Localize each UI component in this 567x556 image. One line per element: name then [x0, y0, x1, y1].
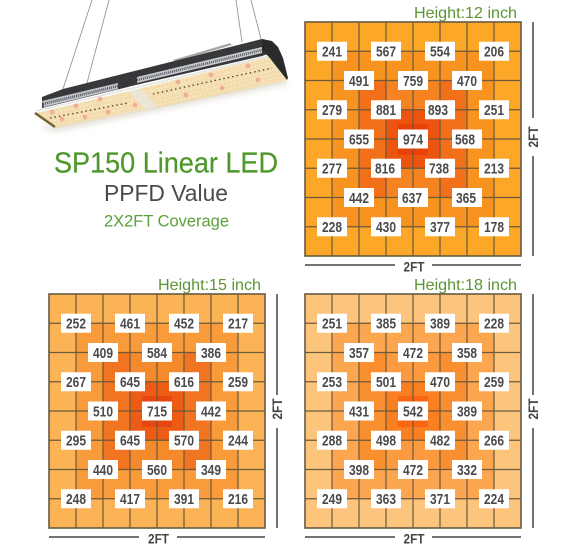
PPFD values: 358 — [457, 345, 477, 362]
PPFD values: 389 — [457, 403, 477, 420]
PPFD values: 655 — [349, 131, 369, 148]
PPFD values: 259 — [484, 374, 504, 391]
PPFD values: 442 — [349, 190, 369, 207]
PPFD values: 554 — [430, 44, 451, 60]
PPFD values: 295 — [66, 432, 86, 450]
panel: height 12 inch — [305, 5, 541, 274]
PPFD values: 365 — [456, 190, 476, 207]
PPFD values: 881 — [376, 102, 396, 119]
PPFD values: 472 — [403, 462, 423, 479]
PPFD values: 491 — [349, 73, 369, 90]
PPFD values: 259 — [228, 374, 248, 391]
PPFD values: 645 — [120, 432, 140, 450]
PPFD values: 389 — [430, 316, 450, 332]
PPFD values: 482 — [430, 432, 450, 450]
PPFD values: 645 — [120, 374, 140, 391]
icon: left heat fins — [42, 83, 118, 107]
heading: Height:12 inch — [414, 5, 517, 22]
PPFD values: 252 — [66, 316, 86, 332]
panel: height 15 inch — [49, 277, 285, 546]
PPFD values: 228 — [322, 219, 342, 236]
height dimension: 2FT — [525, 126, 541, 148]
PPFD values: 385 — [376, 316, 396, 332]
PPFD values: 371 — [430, 491, 450, 508]
icon: right heat fins — [137, 47, 262, 83]
PPFD values — [317, 314, 509, 508]
PPFD values: 391 — [174, 491, 194, 508]
PPFD values: 216 — [228, 491, 248, 508]
PPFD values: 277 — [322, 160, 342, 178]
PPFD values: 377 — [430, 219, 450, 236]
PPFD values: 386 — [201, 345, 221, 362]
heat map — [305, 22, 521, 256]
PPFD values — [61, 314, 253, 508]
icon: hanging wires — [63, 0, 261, 89]
PPFD values: 584 — [147, 345, 168, 362]
PPFD values: 178 — [484, 219, 504, 236]
PPFD values: 567 — [376, 44, 396, 60]
PPFD values: 431 — [349, 403, 369, 420]
PPFD values: 510 — [93, 403, 113, 420]
icon: silver edge — [36, 56, 269, 111]
PPFD values: 248 — [66, 491, 86, 508]
PPFD values: 637 — [402, 190, 422, 207]
PPFD values: 213 — [484, 160, 504, 178]
PPFD values: 442 — [201, 403, 221, 420]
PPFD values: 501 — [376, 374, 396, 391]
width dimension: 2FT — [404, 258, 425, 274]
PPFD values: 759 — [403, 73, 423, 90]
PPFD values: 279 — [322, 102, 342, 119]
icon: top bracket — [173, 43, 232, 62]
PPFD values: 206 — [484, 44, 504, 60]
icon: right end cap — [262, 39, 288, 80]
height dimension: 2FT — [525, 398, 541, 420]
PPFD values: 440 — [93, 462, 113, 479]
PPFD values: 253 — [322, 374, 342, 391]
icon: center connector — [129, 88, 157, 110]
icon: bronze edge — [35, 113, 55, 127]
PPFD values: 498 — [376, 432, 396, 450]
PPFD values: 228 — [484, 316, 504, 332]
PPFD values: 461 — [120, 316, 140, 332]
PPFD values: 349 — [201, 462, 221, 479]
width dimension: 2FT — [148, 530, 169, 546]
heading: Height:18 inch — [414, 277, 517, 294]
PPFD values: 816 — [375, 160, 395, 178]
icon: lamp body — [42, 39, 274, 108]
height dimension: 2FT — [269, 398, 285, 420]
PPFD values: 893 — [428, 102, 448, 119]
PPFD values: 452 — [174, 316, 194, 332]
PPFD values: 430 — [376, 219, 396, 236]
PPFD values: 249 — [322, 491, 342, 508]
PPFD values: 224 — [484, 491, 505, 508]
PPFD values: 363 — [376, 491, 396, 508]
PPFD values: 267 — [66, 374, 86, 391]
PPFD values: 266 — [484, 432, 504, 450]
panel: height 18 inch — [305, 277, 541, 546]
PPFD values: 398 — [349, 462, 369, 479]
PPFD values: 542 — [403, 403, 423, 420]
heat map — [305, 294, 521, 528]
heat map — [49, 294, 265, 528]
icon: dark driver dots — [50, 68, 272, 118]
coverage note: 2X2FT Coverage — [104, 212, 229, 230]
PPFD values: 738 — [429, 160, 449, 178]
icon: light front rim — [55, 81, 287, 128]
PPFD values: 241 — [322, 44, 342, 60]
icon: left LED board — [36, 91, 146, 127]
PPFD values: 570 — [174, 432, 194, 450]
PPFD values: 357 — [349, 345, 369, 362]
icon: lamp shadow — [40, 78, 290, 132]
PPFD values — [317, 42, 509, 236]
PPFD values: 974 — [403, 131, 424, 148]
icon: pink LEDs — [50, 64, 260, 121]
PPFD values: 417 — [120, 491, 140, 508]
PPFD values: 470 — [430, 374, 450, 391]
heading: Height:15 inch — [158, 277, 261, 294]
PPFD values: 470 — [457, 73, 477, 90]
PPFD values: 568 — [455, 131, 475, 148]
PPFD values: 332 — [457, 462, 477, 479]
PPFD values: 244 — [228, 432, 249, 450]
PPFD values: 616 — [174, 374, 194, 391]
PPFD values: 251 — [484, 102, 504, 119]
title: SP150 Linear LED — [54, 148, 278, 180]
PPFD values: 560 — [147, 462, 167, 479]
PPFD values: 217 — [228, 316, 248, 332]
subtitle: PPFD Value — [104, 180, 228, 206]
product image: LED light — [35, 0, 290, 132]
width dimension: 2FT — [404, 530, 425, 546]
PPFD values: 251 — [322, 316, 342, 332]
PPFD values: 409 — [93, 345, 113, 362]
PPFD values: 472 — [403, 345, 423, 362]
PPFD values: 288 — [322, 432, 342, 450]
icon: right LED board — [141, 57, 287, 108]
PPFD values: 715 — [147, 403, 167, 420]
